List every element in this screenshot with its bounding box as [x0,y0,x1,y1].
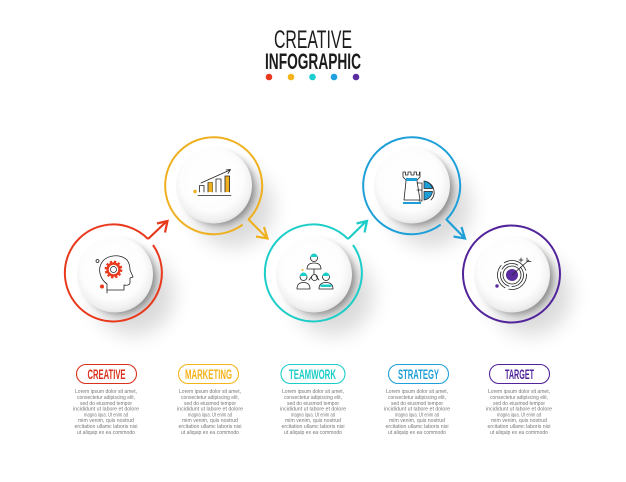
step 1 circle: creative [65,221,174,335]
body text: teamwork: mim venim, quis nostrud [285,418,341,424]
body text: creative: Lorem ipsum dolor sit amet, [75,389,137,395]
body text: target: consectetur adipiscing elit, [490,395,548,401]
body text: strategy [384,389,450,436]
body text: teamwork [280,389,346,436]
column: strategy [384,364,450,436]
body text: strategy: magna iqua. Ut enim ad [395,412,439,418]
body text: marketing: consectetur adipiscing elit, [181,395,239,401]
body text: marketing: ut aliquip ex ea commodo [181,430,239,436]
body text: creative: consectetur adipiscing elit, [77,395,135,401]
label pill: marketing: MARKETING [185,367,232,382]
body text: teamwork: Lorem ipsum dolor sit amet, [282,389,344,395]
title: CREATIVE [274,26,352,54]
body text: marketing: mim venim, quis nostrud [182,418,238,424]
body text: marketing: Lorem ipsum dolor sit amet, [179,389,241,395]
body text: marketing: magna iqua. Ut enim ad [188,412,232,418]
body text: creative: ut aliquip ex ea commodo [77,430,135,436]
body text: creative: sed do eiusmod tempor [80,401,132,407]
icon: team hierarchy [297,254,333,289]
body text: strategy: consectetur adipiscing elit, [388,395,446,401]
step 4 circle: strategy [363,137,471,247]
column: teamwork [280,364,346,436]
label pill: target: TARGET [505,367,534,382]
body text: target: Lorem ipsum dolor sit amet, [488,389,550,395]
body text: teamwork: incididunt ut labore et dolore [280,407,346,413]
icon: growth bar chart [193,170,231,196]
body text: target: ercitation ullamc laboris nisi [488,424,550,430]
body text: creative: ercitation ullamc laboris nisi [74,424,138,430]
body text: target: magna iqua. Ut enim ad [497,412,541,418]
icon: target with dart [495,258,531,290]
body text: teamwork: magna iqua. Ut enim ad [291,412,335,418]
body text: strategy: ercitation ullamc laboris nisi [386,424,448,430]
body text: strategy: mim venim, quis nostrud [389,418,445,424]
icon: chess rook and pie [403,172,434,204]
label pill: teamwork: TEAMWORK [289,367,336,382]
body text: creative: mim venim, quis nostrud [78,418,134,424]
body text: target: incididunt ut labore et dolore [486,407,552,413]
body text: target [486,389,552,436]
label pill: creative: CREATIVE [88,367,126,382]
body text: strategy: Lorem ipsum dolor sit amet, [386,389,448,395]
column: creative [73,364,139,436]
body text: strategy: ut aliquip ex ea commodo [388,430,446,436]
body text: strategy: incididunt ut labore et dolore [384,407,450,413]
body text: marketing: incididunt ut labore et dolore [177,407,243,413]
title [265,26,361,74]
step 5 circle: target [463,226,571,335]
icon: head with gear [96,256,133,293]
body text: strategy: sed do eiusmod tempor [391,401,443,407]
body text: marketing [177,389,243,436]
body text: creative [73,389,139,436]
body text: teamwork: ut aliquip ex ea commodo [284,430,342,436]
column: marketing [177,364,243,436]
label pill: strategy: STRATEGY [398,367,439,382]
step 2 circle: marketing [165,137,273,247]
body text: teamwork: sed do eiusmod tempor [287,401,339,407]
body text: teamwork: ercitation ullamc laboris nisi [282,424,344,430]
body text: marketing: sed do eiusmod tempor [184,401,236,407]
title: INFOGRAPHIC [265,49,361,74]
body text: teamwork: consectetur adipiscing elit, [284,395,342,401]
body text: creative: magna iqua. Ut enim ad [84,412,128,418]
body text: target: ut aliquip ex ea commodo [490,430,548,436]
body text: marketing: ercitation ullamc laboris nisi [178,424,242,430]
body text: creative: incididunt ut labore et dolore [73,407,139,413]
title colour dots [266,74,359,80]
body text: target: mim venim, quis nostrud [491,418,547,424]
step 3 circle: teamwork [265,221,373,335]
column: target [486,364,552,436]
body text: target: sed do eiusmod tempor [493,401,545,407]
